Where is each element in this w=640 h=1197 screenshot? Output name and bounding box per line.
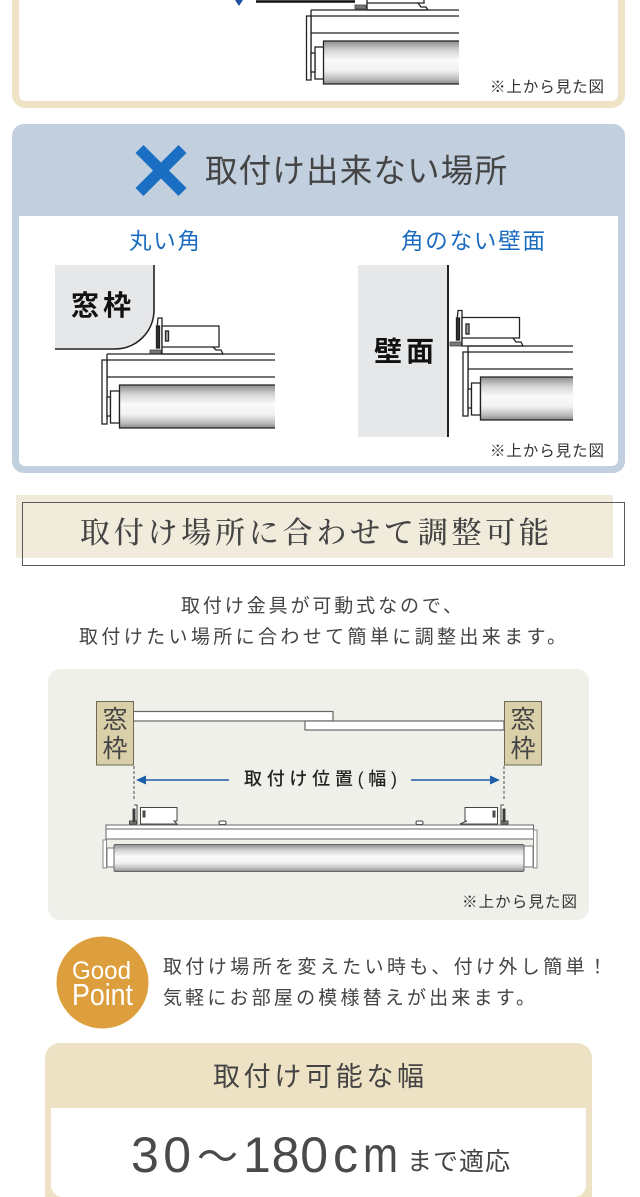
icon: blue cross bbox=[136, 145, 186, 196]
panel: adjustable width diagram bbox=[48, 669, 589, 920]
arrow: right bbox=[411, 776, 500, 784]
panel: installable location (top, cropped) bbox=[16, 0, 622, 104]
value: 30-180 cm: ～ bbox=[197, 1134, 238, 1180]
text block: good point description: 気軽にお部屋の模様替えが出来ます。 bbox=[163, 987, 535, 1009]
icon: left window frame: 枠 bbox=[102, 735, 128, 763]
diagram: top view of blind against wall bbox=[235, 0, 459, 84]
window frame rails bbox=[133, 712, 504, 730]
icon: left window frame: 窓 bbox=[102, 706, 128, 734]
label: rounded corner: 丸い角 bbox=[129, 229, 200, 254]
icon: left window frame bbox=[96, 702, 134, 765]
diagram: rounded window frame: 窓枠 bbox=[71, 290, 131, 321]
value: 30-180 cm: 30 bbox=[131, 1127, 191, 1183]
icon: right window frame: 枠 bbox=[510, 735, 536, 763]
diagram: wall with no corner bbox=[358, 265, 573, 437]
note: view from above: ※上から見た図 bbox=[490, 442, 604, 460]
heading: installable width: 取付け可能な幅 bbox=[213, 1062, 424, 1092]
value: 30-180 cm: c bbox=[333, 1127, 358, 1183]
badge: Good Point: Point bbox=[72, 977, 133, 1012]
text block: description bbox=[79, 595, 566, 648]
text block: description: 取付け金具が可動式なので、 bbox=[181, 595, 462, 617]
value: 30-180 cm: m bbox=[363, 1127, 398, 1183]
text block: good point description bbox=[163, 956, 607, 1009]
value: 30-180 cm bbox=[131, 1127, 398, 1183]
label: wall without corner: 角のない壁面 bbox=[401, 229, 545, 254]
panel: locations where installation is not possible bbox=[12, 124, 625, 473]
diagram: roller blind full width bbox=[103, 805, 537, 872]
arrow: left bbox=[136, 776, 229, 784]
diagram: wall with no corner: 壁面 bbox=[374, 336, 434, 367]
note: view from above: ※上から見た図 bbox=[490, 78, 604, 96]
label: installation position (width): 取付け位置(幅) bbox=[244, 769, 397, 789]
text block: description: 取付けたい場所に合わせて簡単に調整出来ます。 bbox=[79, 626, 566, 648]
heading: adjustable to location: 取付け場所に合わせて調整可能 bbox=[80, 517, 549, 550]
icon: right window frame bbox=[504, 702, 542, 765]
badge: Good Point bbox=[56, 936, 148, 1028]
panel: installable width bbox=[45, 1043, 592, 1197]
note: view from above: ※上から見た図 bbox=[462, 893, 577, 911]
label: applicable up to: まで適応 bbox=[407, 1148, 510, 1176]
heading: not installable: 取付け出来ない場所 bbox=[205, 153, 507, 189]
text block: good point description: 取付け場所を変えたい時も、付け外し簡単！ bbox=[163, 956, 607, 978]
diagram: rounded window frame bbox=[55, 265, 275, 428]
value: 30-180 cm: 180 bbox=[243, 1127, 328, 1183]
icon: right window frame: 窓 bbox=[510, 706, 536, 734]
badge: Good Point: Good bbox=[72, 957, 131, 985]
heading: adjustable to location bbox=[16, 495, 624, 566]
